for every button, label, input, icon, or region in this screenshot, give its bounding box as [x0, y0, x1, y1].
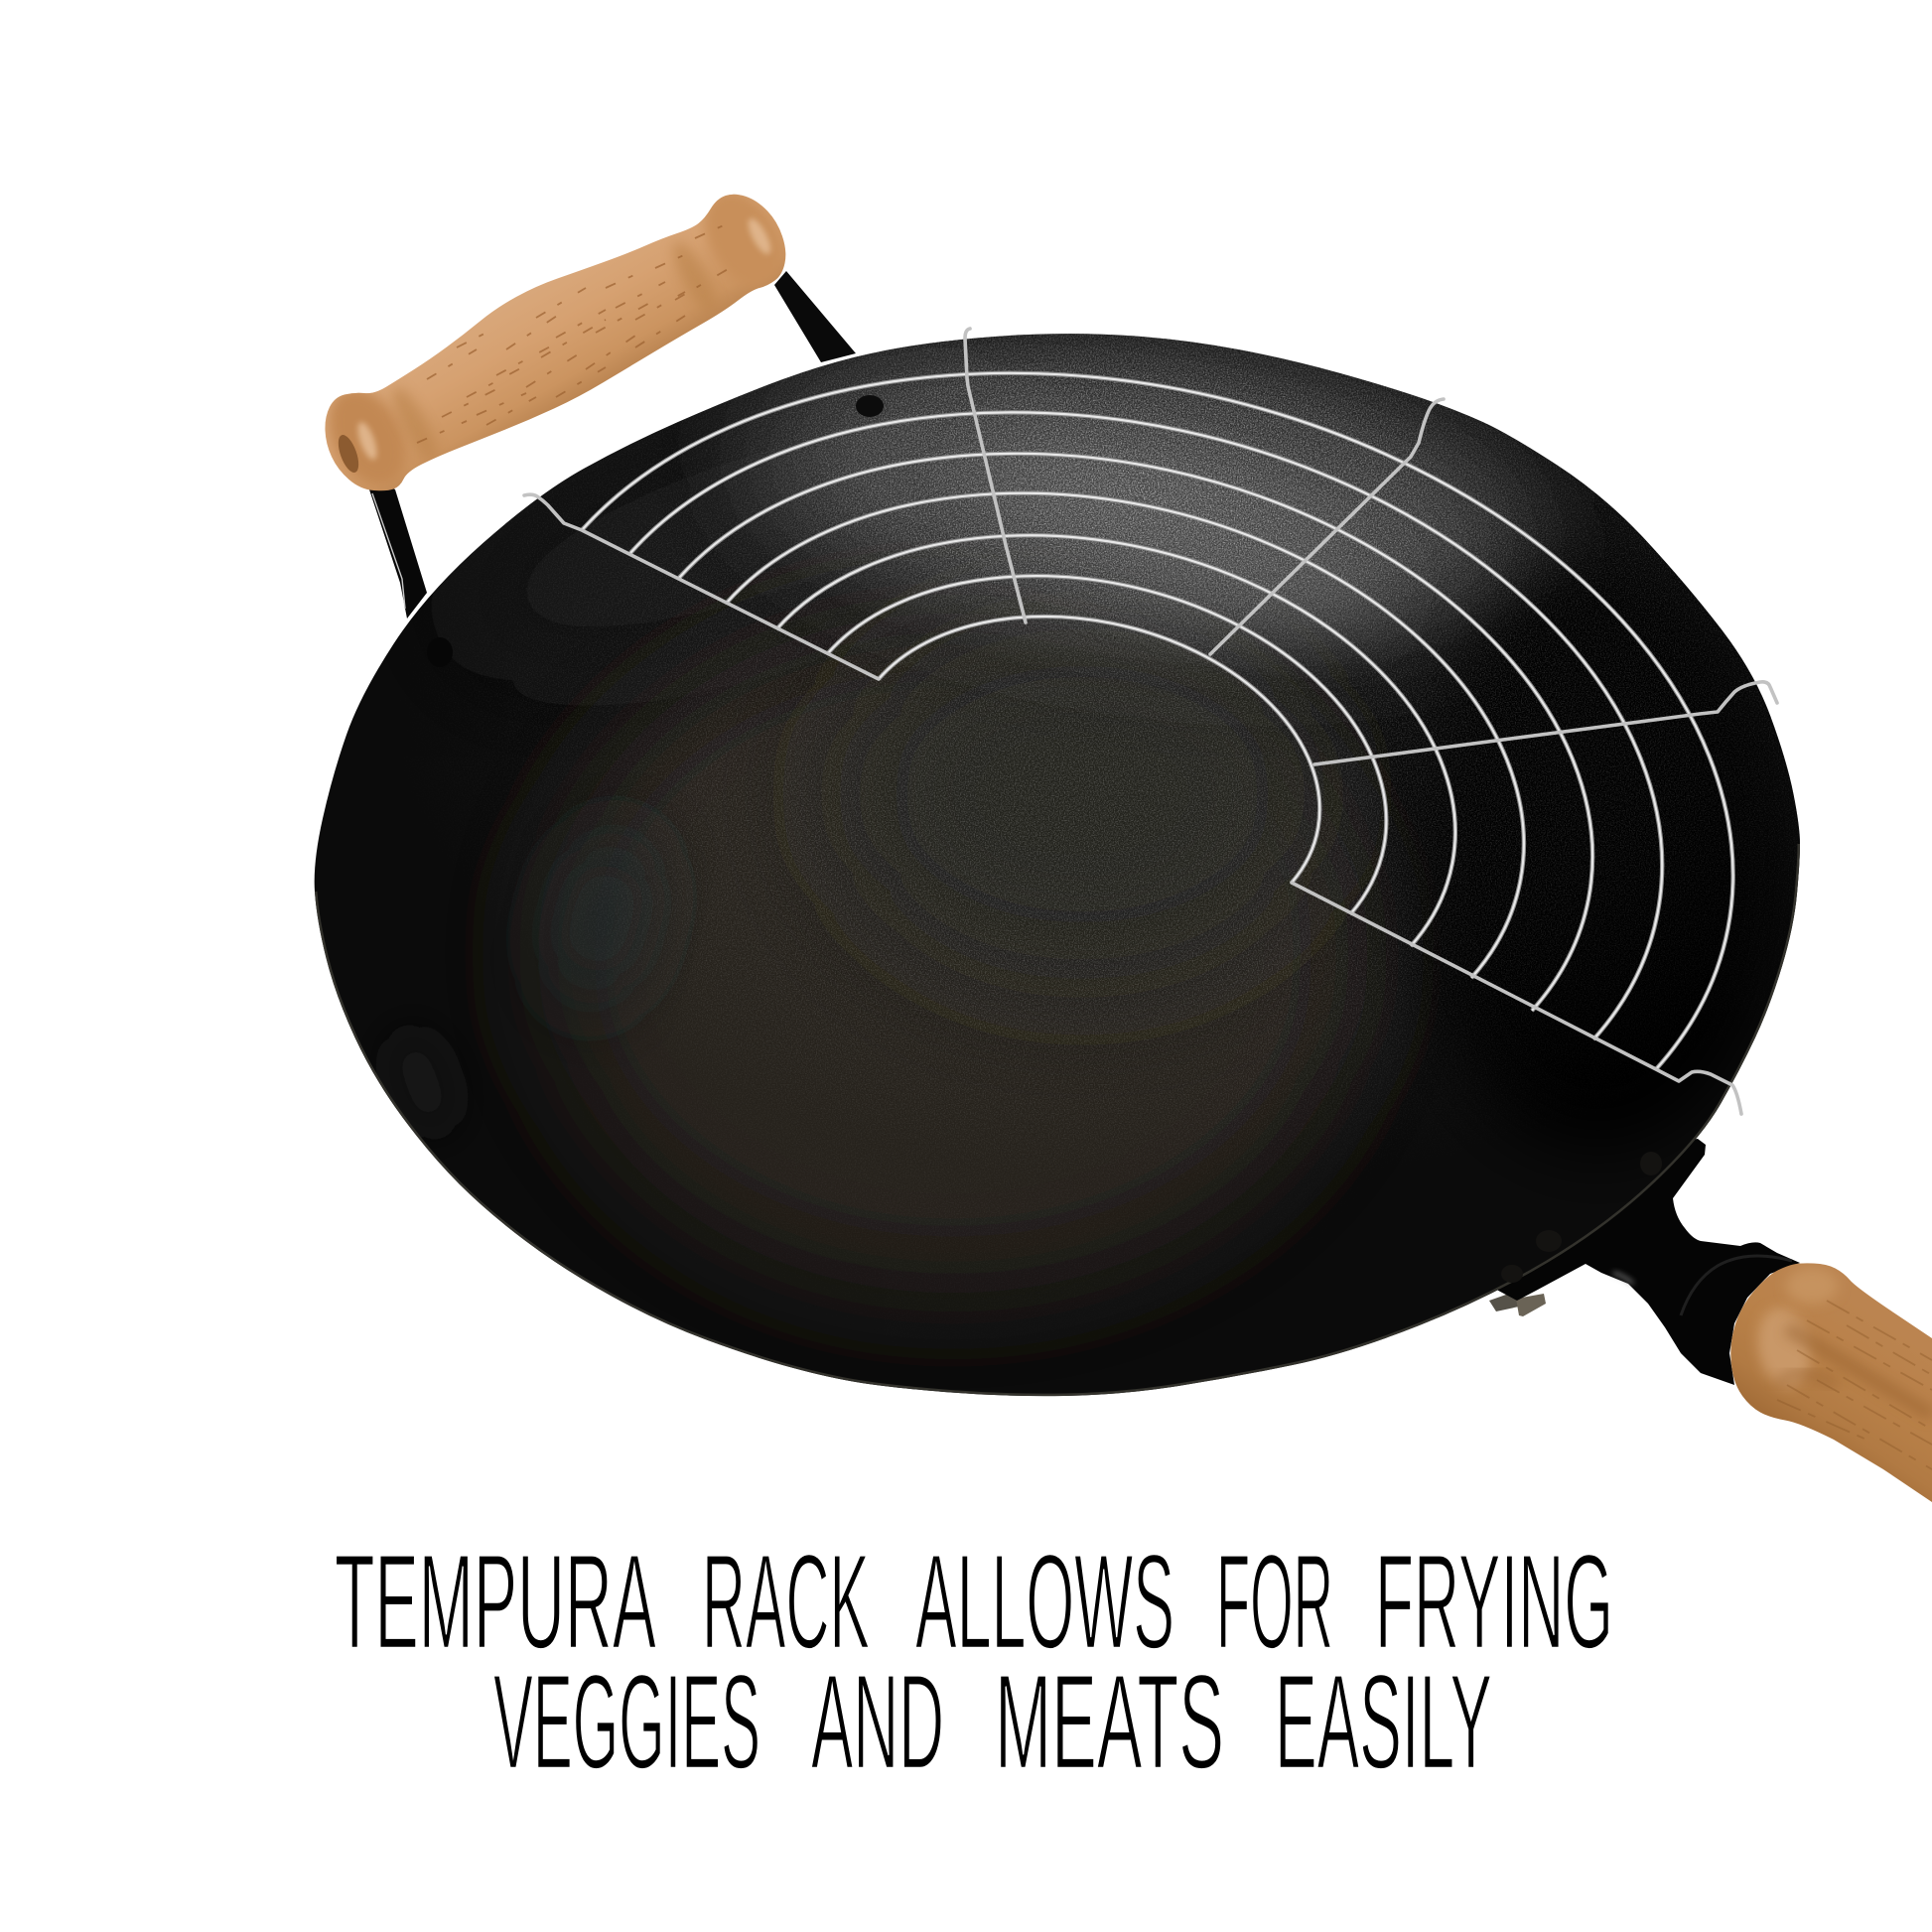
rim edge	[315, 844, 1800, 1396]
wok pan	[315, 159, 1932, 1396]
side loop handle with bracket	[314, 177, 856, 619]
pan body	[315, 334, 1800, 1396]
wooden grip	[325, 195, 786, 490]
caption: tempura rack benefit: VEGGIES	[493, 1646, 760, 1797]
caption: tempura rack benefit	[335, 1526, 1613, 1797]
caption: tempura rack benefit: FOR	[1216, 1526, 1333, 1677]
mounting bolts	[1489, 1291, 1546, 1316]
product photo illustration with caption: FRYING	[1375, 1526, 1613, 1677]
bracket gloss	[1613, 1273, 1633, 1284]
ring highlights	[582, 200, 1932, 1069]
caption: tempura rack benefit: MEATS	[995, 1646, 1224, 1797]
concentric rack rings	[582, 200, 1932, 1069]
bracket ring highlight	[1681, 1256, 1792, 1315]
rivets	[427, 395, 1662, 1283]
tempura rack	[524, 200, 1932, 1114]
spokes and hooks	[524, 329, 1777, 1114]
icon: upper bracket strut	[774, 271, 856, 362]
strut highlight	[372, 493, 405, 609]
icon: bolt hole in handle end	[335, 432, 362, 476]
caption: tempura rack benefit: TEMPURA	[335, 1526, 656, 1677]
wooden grip	[1730, 1263, 1932, 1502]
long wooden handle and black bracket	[1489, 1139, 1932, 1502]
caption: tempura rack benefit: EASILY	[1275, 1646, 1492, 1797]
pan shading and coating texture	[375, 159, 1932, 1370]
caption: tempura rack benefit: AND	[811, 1646, 944, 1797]
black bracket	[1489, 1139, 1800, 1385]
icon: lower bracket strut	[364, 475, 427, 619]
caption: tempura rack benefit: ALLOWS	[915, 1526, 1174, 1677]
product photo illustration with caption	[314, 195, 1932, 1769]
caption: tempura rack benefit: RACK	[702, 1526, 870, 1677]
